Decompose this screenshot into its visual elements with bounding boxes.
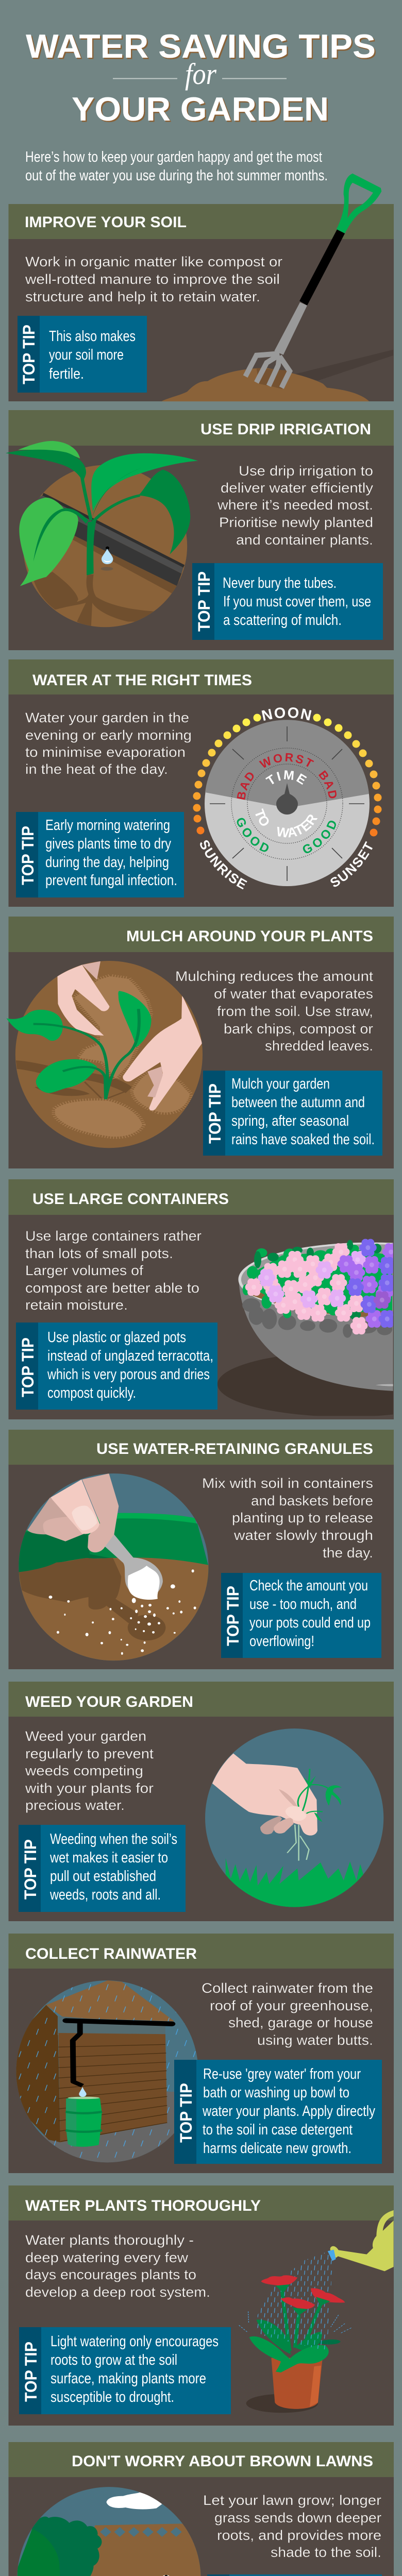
illustration: spoon of granules (15, 1472, 213, 1663)
title (26, 27, 376, 128)
top tip: Light watering only encourages (51, 2333, 219, 2350)
icon: water drop (79, 2087, 87, 2097)
top tip: to the soil in case detergent (203, 2122, 353, 2138)
dial labels: BAD (319, 770, 337, 799)
body text: of water that evaporates (214, 986, 373, 1002)
red flowers (261, 2275, 345, 2309)
top tip (19, 1825, 186, 1912)
body text: from the soil. Use straw, (217, 1004, 373, 1019)
body text: develop a deep root system. (25, 2284, 210, 2300)
panel: collect rainwater (8, 1934, 394, 2173)
top tip: overflowing! (249, 1633, 314, 1650)
top tip (174, 2060, 382, 2164)
panel: use large containers (8, 1179, 402, 1419)
granules (49, 1566, 196, 1655)
top tip: which is very porous and dries (47, 1366, 210, 1383)
body text: Water plants thoroughly - (25, 2232, 194, 2248)
water butt (65, 2097, 102, 2147)
needle (276, 783, 298, 815)
dial labels: GOOD (303, 820, 336, 853)
heading: USE LARGE CONTAINERS (32, 1191, 229, 1208)
illustration: garden fork in soil (161, 174, 393, 401)
body text: well-rotted manure to improve the soil (25, 272, 280, 287)
body text: Use drip irrigation to (239, 463, 373, 479)
dial labels: BAD (237, 772, 254, 800)
top tip: TOP TIP (195, 571, 213, 632)
sun position dots (193, 714, 381, 837)
body text: using water butts. (257, 2032, 373, 2048)
top tip: during the day, helping (45, 854, 169, 871)
illustration: hands mulching a plant (6, 961, 203, 1148)
spray (257, 2251, 333, 2351)
body text (217, 463, 374, 548)
body text: roots, and provides more (217, 2528, 381, 2543)
dial labels (200, 707, 373, 889)
cloud (106, 2493, 162, 2509)
top tip: Weeding when the soil’s (50, 1831, 177, 1848)
illustration: garden with brown lawn patches (17, 2487, 205, 2576)
body text: Collect rainwater from the (202, 1980, 373, 1996)
top tip: a scattering of mulch. (223, 612, 342, 629)
body text: grass sends down deeper (214, 2510, 381, 2526)
panel: weed your garden (8, 1682, 394, 1921)
heading: IMPROVE YOUR SOIL (25, 214, 187, 231)
heading: COLLECT RAINWATER (25, 1945, 197, 1962)
panel: improve your soil (8, 174, 394, 401)
body text (175, 969, 374, 1054)
top tip: TOP TIP (22, 2342, 40, 2402)
body text: Weed your garden (25, 1728, 146, 1744)
top tip: harms delicate new growth. (203, 2140, 351, 2157)
top tip: TOP TIP (21, 1839, 40, 1900)
title: WATER SAVING TIPS (26, 27, 376, 65)
heading: MULCH AROUND YOUR PLANTS (126, 928, 373, 945)
top tip: wet makes it easier to (49, 1850, 168, 1866)
body text: regularly to prevent (25, 1746, 154, 1761)
title: for (185, 57, 216, 91)
top tip: bath or washing up bowl to (203, 2084, 349, 2101)
top tip: If you must cover them, use (223, 594, 371, 610)
top tip: TOP TIP (206, 1083, 224, 1144)
top tip: TOP TIP (19, 826, 37, 885)
body text: planting up to release (232, 1510, 373, 1526)
top tip: pull out established (50, 1868, 156, 1885)
body text (25, 1728, 154, 1813)
top tip: use - too much, and (249, 1596, 357, 1613)
dial labels: SUNRISE (200, 840, 247, 889)
panel: use water-retaining granules (8, 1430, 394, 1669)
intro text: out of the water you use during the hot summer months. (25, 167, 328, 184)
body text (25, 254, 282, 304)
top tip (16, 812, 184, 897)
top tip: TOP TIP (224, 1586, 242, 1646)
body text: weeds competing (25, 1763, 143, 1778)
illustration: plant with drip pipe (6, 441, 198, 629)
dial labels: NOON (262, 707, 311, 721)
panel: mulch around your plants (6, 917, 394, 1168)
body text: where it’s needed most. (217, 497, 373, 513)
body text (25, 2232, 210, 2300)
body text: to minimise evaporation (25, 744, 186, 760)
title: YOUR GARDEN (72, 90, 329, 128)
watering can (330, 2210, 394, 2271)
body text: Water your garden in the (25, 710, 189, 725)
top tip (19, 2327, 231, 2414)
body text: Prioritise newly planted (219, 515, 373, 530)
body text: Use large containers rather (25, 1228, 202, 1244)
top tip: instead of unglazed terracotta, (47, 1348, 213, 1364)
top tip: between the autumn and (231, 1094, 365, 1111)
illustration: hand pulling weed (205, 1728, 384, 1908)
top tip: roots to grow at the soil (51, 2352, 177, 2368)
body text: precious water. (25, 1798, 125, 1813)
heading: WATER AT THE RIGHT TIMES (32, 672, 252, 689)
body text: compost are better able to (25, 1280, 199, 1296)
body text: evening or early morning (25, 727, 192, 743)
panel: use drip irrigation (6, 410, 394, 650)
top tip (221, 1573, 381, 1658)
body text (202, 1980, 373, 2048)
top tip: TOP TIP (19, 1337, 37, 1397)
dial labels: TIME (265, 770, 307, 785)
top tip: TOP TIP (177, 2083, 195, 2143)
dial labels: WORST (259, 753, 314, 768)
icon: football (160, 2575, 172, 2576)
panel: water plants thoroughly (8, 2185, 394, 2426)
heading: USE WATER-RETAINING GRANULES (96, 1440, 373, 1458)
body text: and baskets before (251, 1493, 373, 1509)
top tip (203, 1071, 382, 1156)
top tip: your soil more (49, 347, 124, 363)
illustration: watering can and potted flowers (239, 2210, 394, 2413)
body text: in the heat of the day. (25, 761, 168, 777)
top tip: prevent fungal infection. (45, 872, 177, 889)
top tip: your pots could end up (249, 1615, 371, 1631)
dial labels: TO WATER (256, 808, 317, 838)
dial labels: GOOD (237, 818, 269, 852)
body text: deliver water efficiently (221, 480, 374, 496)
top tip: Re-use 'grey water' from your (203, 2066, 361, 2082)
top tip: Use plastic or glazed pots (47, 1329, 186, 1346)
body text: days encourages plants to (25, 2267, 196, 2282)
body text (202, 1476, 373, 1561)
illustration: flower bowl (217, 1239, 402, 1417)
body text: Larger volumes of (25, 1263, 144, 1278)
intro text (25, 149, 328, 184)
top tip: gives plants time to dry (45, 836, 171, 852)
top tip: This also makes (49, 328, 136, 345)
dial labels: SUNSET (330, 841, 373, 887)
heading: WEED YOUR GARDEN (25, 1693, 193, 1710)
body text: Mix with soil in containers (202, 1476, 373, 1491)
body text: roof of your greenhouse, (210, 1998, 373, 2013)
heading: USE DRIP IRRIGATION (200, 421, 371, 438)
body text (203, 2493, 381, 2560)
body text: than lots of small pots. (25, 1246, 173, 1261)
icon: water drop (102, 547, 113, 564)
top tip: compost quickly. (47, 1385, 136, 1401)
intro text: Here’s how to keep your garden happy and get the most (25, 149, 322, 165)
body text: deep watering every few (25, 2250, 189, 2265)
top tip (18, 316, 147, 393)
top tip: fertile. (49, 366, 84, 382)
panel: water at the right times (8, 659, 394, 907)
top tip: surface, making plants more (51, 2370, 206, 2387)
heading: WATER PLANTS THOROUGHLY (25, 2197, 261, 2214)
body text: and container plants. (236, 532, 373, 548)
heading: DON'T WORRY ABOUT BROWN LAWNS (72, 2453, 373, 2470)
top tip: weeds, roots and all. (49, 1887, 161, 1903)
body text: shredded leaves. (265, 1038, 373, 1054)
body text: water slowly through (233, 1528, 373, 1543)
top tip: Check the amount you (249, 1578, 368, 1594)
top tip (207, 2574, 382, 2576)
body text: shade to the soil. (271, 2545, 381, 2560)
illustration: shed and water butt in rain (15, 1978, 205, 2164)
panel: don't worry about brown lawns (8, 2442, 394, 2576)
body text: retain moisture. (25, 1297, 128, 1313)
body text (25, 710, 192, 777)
body text: shed, garage or house (228, 2015, 373, 2030)
body text: with your plants for (25, 1781, 154, 1796)
body text (25, 1228, 202, 1313)
top tip (192, 563, 383, 640)
top tip: susceptible to drought. (51, 2389, 174, 2405)
top tip: spring, after seasonal (231, 1113, 349, 1129)
body text: bark chips, compost or (224, 1021, 373, 1037)
top tip (16, 1323, 217, 1410)
top tip: Never bury the tubes. (223, 575, 337, 591)
top tip: Mulch your garden (231, 1076, 330, 1092)
body text: the day. (323, 1545, 373, 1561)
body text: Work in organic matter like compost or (25, 254, 282, 269)
top tip: TOP TIP (20, 325, 38, 384)
body text: structure and help it to retain water. (25, 289, 260, 304)
body text: Let your lawn grow; longer (203, 2493, 381, 2508)
body text: Mulching reduces the amount (175, 969, 374, 984)
dial: best time to water (193, 707, 381, 889)
top tip: Early morning watering (45, 817, 170, 834)
